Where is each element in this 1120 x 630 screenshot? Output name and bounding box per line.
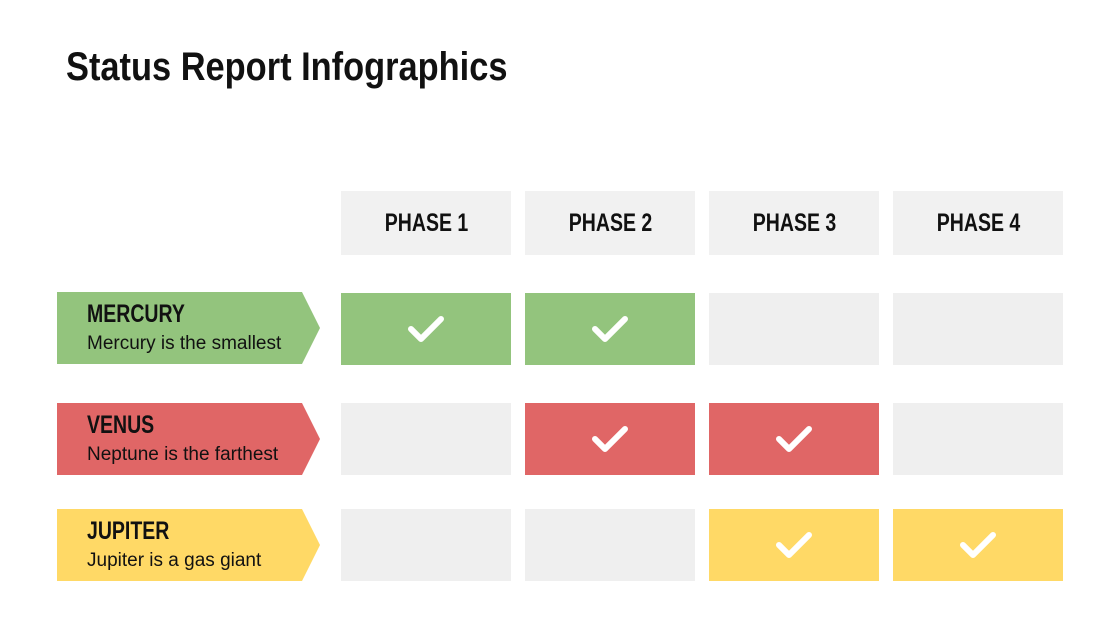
jupiter phase 3 check xyxy=(709,509,879,581)
venus phase 1 empty xyxy=(341,403,511,475)
label: mercury: MERCURY xyxy=(87,300,185,328)
header: phase 1 xyxy=(341,191,511,255)
jupiter phase 2 empty xyxy=(525,509,695,581)
label: venus: VENUS xyxy=(87,411,154,439)
venus phase 2 check xyxy=(525,403,695,475)
label: mercury xyxy=(57,292,320,364)
label: jupiter: JUPITER xyxy=(87,517,169,545)
header: phase 1: PHASE 1 xyxy=(384,208,468,236)
header: phase 2 xyxy=(525,191,695,255)
header: phase 4 xyxy=(893,191,1063,255)
mercury phase 4 empty xyxy=(893,293,1063,365)
label: jupiter xyxy=(57,509,320,581)
jupiter phase 4 check xyxy=(893,509,1063,581)
header: phase 3: PHASE 3 xyxy=(752,208,836,236)
header: phase 4: PHASE 4 xyxy=(936,208,1020,236)
label: mercury: Mercury is the smallest xyxy=(87,333,281,354)
label: jupiter: Jupiter is a gas giant xyxy=(87,550,261,571)
venus phase 3 check xyxy=(709,403,879,475)
mercury phase 1 check xyxy=(341,293,511,365)
header: phase 3 xyxy=(709,191,879,255)
mercury phase 3 empty xyxy=(709,293,879,365)
header: phase 2: PHASE 2 xyxy=(568,208,652,236)
label: venus xyxy=(57,403,320,475)
venus phase 4 empty xyxy=(893,403,1063,475)
jupiter phase 1 empty xyxy=(341,509,511,581)
label: venus: Neptune is the farthest xyxy=(87,444,278,465)
title: Status Report Infographics xyxy=(66,45,508,89)
mercury phase 2 check xyxy=(525,293,695,365)
